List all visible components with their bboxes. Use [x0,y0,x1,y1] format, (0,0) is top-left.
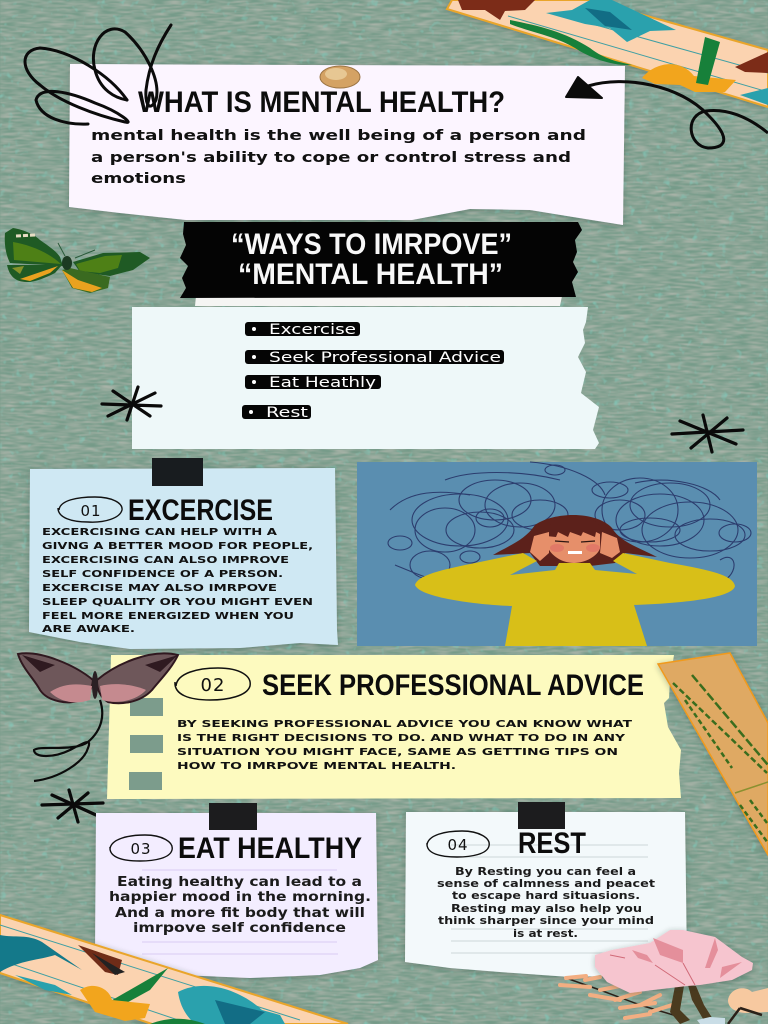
list item: excercise [245,322,360,338]
panel: 01 excercise [29,458,338,649]
body text [109,875,371,936]
body text: BY SEEKING PROFESSIONAL ADVICE YOU CAN KNOW WHAT [177,719,632,730]
body text: HOW TO IMRPOVE MENTAL HEALTH. [177,761,456,772]
number badge 03 [110,835,172,861]
body text: IS THE RIGHT DECISIONS TO DO. AND WHAT TO DO IN ANY [177,733,626,744]
decorative floral tape: bottom left [0,915,348,1024]
petals [595,930,753,993]
body text [437,865,655,940]
list item: rest: Rest [266,405,308,421]
branch with peach fronds [560,976,680,1018]
list item: eat heathly [245,375,381,391]
number badge 02 [175,668,250,700]
decorative floral tape: top right [447,0,768,107]
body text: And a more fit body that will [115,906,365,921]
body text [177,719,632,772]
body text [42,527,313,635]
body text: FEEL MORE ENERGIZED WHEN YOU [42,611,294,622]
body text: think sharper since your mind [438,914,654,927]
panel: what is mental health [69,64,625,225]
heading: REST [518,827,586,860]
icon: asterisk by list [102,387,161,420]
number badge 04 [427,831,489,857]
icon: maroon butterfly with trailing line [18,653,178,781]
definition text: emotions [91,171,186,187]
body text: GIVNG A BETTER MOOD FOR PEOPLE, [42,541,313,552]
list item: rest [242,405,311,421]
hair back [493,515,657,566]
banner text: “WAYS TO IMRPOVE” [231,228,512,261]
number badge 04: 04 [447,836,469,854]
definition text [91,128,586,187]
body text: happier mood in the morning. [109,890,371,905]
body text: Eating healthy can lead to a [117,875,362,890]
definition text: a person's ability to cope or control stress and [91,150,571,166]
list item: seek professional advice: Seek Professional Advice [269,350,501,366]
note lines [142,870,338,954]
body text: SITUATION YOU MIGHT FACE, SAME AS GETTING TIPS ON [177,747,618,758]
body text: ARE AWAKE. [42,624,135,635]
note lines [451,845,648,953]
number badge 01 [58,497,122,522]
panel: 02 seek professional advice [107,655,681,799]
binder holes [129,698,163,790]
sweater [415,553,735,646]
list item: excercise: Excercise [269,322,356,338]
scribble: top-left swirl [25,25,171,124]
definition text: mental health is the well being of a person and [91,128,586,144]
tape [152,458,203,486]
body text: sense of calmness and peacet [437,877,655,890]
decorative handwritten tape: right [658,653,768,855]
number badge 01: 01 [80,502,102,520]
arrow: curved pointer to heading [566,77,768,148]
icon: asterisk right [672,415,743,452]
small peach flower [728,988,768,1013]
list item: seek professional advice [245,350,504,366]
illustration: stressed woman [357,462,757,646]
banner: ways to improve [180,222,582,306]
body text: EXCERCISING CAN ALSO IMPROVE [42,555,289,566]
banner text [231,228,512,291]
heading: WHAT IS MENTAL HEALTH? [138,86,505,119]
scribbles [388,462,751,583]
paper sheet [69,64,625,225]
number badge 02: 02 [201,675,225,696]
body text: to escape hard situasions. [452,889,640,902]
body text: SELF CONFIDENCE OF A PERSON. [42,569,283,580]
icon: gold pin [320,66,360,88]
list item: eat heathly: Eat Heathly [269,375,377,391]
heading: SEEK PROFESSIONAL ADVICE [262,669,644,702]
tape [209,803,257,830]
face and hands [530,516,620,563]
icon: asterisk lower left [42,790,103,822]
icon: green butterfly [5,228,150,293]
body text: SLEEP QUALITY OR YOU MIGHT EVEN [42,597,313,608]
illustration: pink flower and branches [560,930,768,1024]
panel: list of ways [132,307,599,449]
body text: is at rest. [513,927,578,940]
body text: imrpove self confidence [133,921,346,936]
panel: 03 eat healthy [95,803,378,978]
number badge 03: 03 [130,840,152,858]
body text: EXCERCISING CAN HELP WITH A [42,527,277,538]
tape [518,802,565,829]
body text: EXCERCISE MAY ALSO IMRPOVE [42,583,277,594]
heading: EAT HEALTHY [178,832,362,865]
panel: 04 rest [405,802,687,977]
banner text: “MENTAL HEALTH” [238,258,503,291]
heading: EXCERCISE [128,494,273,527]
body text: By Resting you can feel a [455,865,636,878]
stems [670,986,690,1024]
body text: Resting may also help you [451,902,642,915]
